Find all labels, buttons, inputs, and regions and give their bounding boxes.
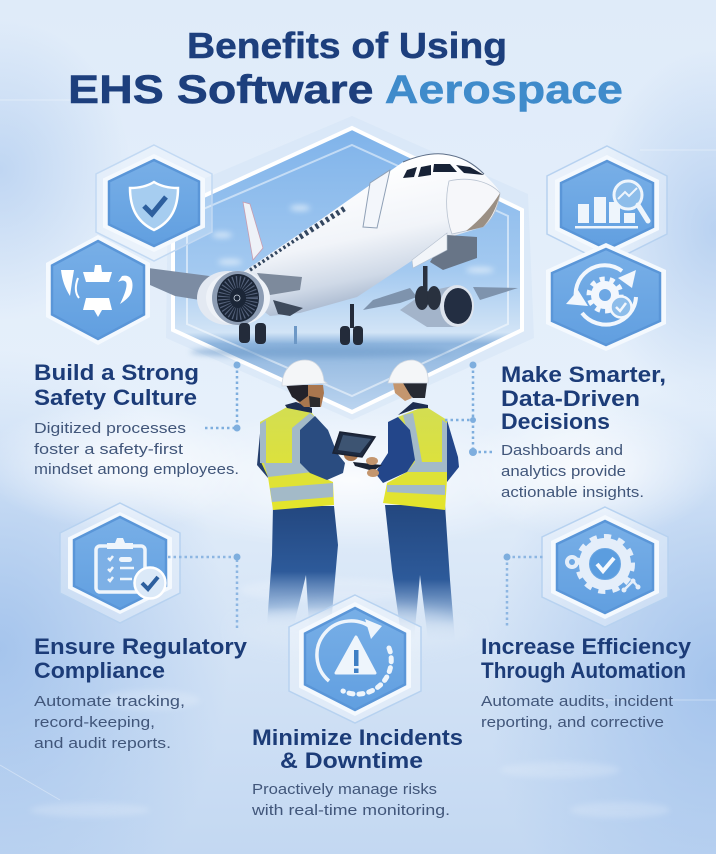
text block: data-driven decisions: actionable insights. xyxy=(501,484,644,501)
right worker xyxy=(375,360,459,640)
icon hexagon: analytics xyxy=(547,146,667,264)
far wing xyxy=(363,287,518,310)
text block: data-driven decisions: Data-Driven xyxy=(501,386,640,411)
text block: safety culture: mindset among employees. xyxy=(34,461,239,478)
icon: rotating symbols xyxy=(61,265,133,317)
icon: bars and magnifier xyxy=(575,181,648,228)
text block: efficiency automation: reporting, and corrective xyxy=(481,714,664,731)
text block: efficiency automation: Increase Efficiency xyxy=(481,634,692,659)
hard hat xyxy=(388,360,428,383)
text block: safety culture: Build a Strong xyxy=(34,360,199,385)
icon hexagon: regulatory clipboard xyxy=(60,503,180,623)
gear bay xyxy=(430,235,477,270)
title: Benefits of Using xyxy=(187,25,507,66)
ground fog xyxy=(235,608,475,652)
text block: efficiency automation: Automate audits, incident xyxy=(481,693,674,710)
trousers xyxy=(385,505,455,640)
text block: regulatory compliance: Ensure Regulatory xyxy=(34,634,248,659)
hair xyxy=(402,383,427,398)
text block: safety culture: Digitized processes xyxy=(34,420,186,437)
icon hexagon: safety shield xyxy=(96,145,212,261)
icon: warning with cycle xyxy=(317,619,391,694)
text block: minimize incidents: with real-time monitoring. xyxy=(251,802,450,819)
text block: minimize incidents: Proactively manage risks xyxy=(252,781,437,798)
icon hexagon: automation gear xyxy=(542,507,668,627)
connector: data decisions xyxy=(445,362,492,456)
text block: efficiency automation xyxy=(481,634,692,731)
neck and face xyxy=(296,385,324,407)
text block: safety culture: foster a safety-first xyxy=(34,441,184,458)
collar xyxy=(285,402,312,413)
reflective stripes xyxy=(260,413,333,502)
collar xyxy=(398,402,428,415)
connector: safety culture xyxy=(205,362,240,432)
text block: regulatory compliance xyxy=(34,634,248,752)
nose gear xyxy=(415,266,441,310)
text block: regulatory compliance: record-keeping, xyxy=(34,714,155,731)
workers illustration xyxy=(257,360,459,640)
hand xyxy=(344,449,358,461)
text block: regulatory compliance: Automate tracking, xyxy=(34,693,185,710)
connector: regulatory compliance xyxy=(168,554,240,628)
text block: data-driven decisions: Dashboards and xyxy=(501,442,623,459)
text block: safety culture: Safety Culture xyxy=(34,385,197,410)
right engine xyxy=(400,285,474,327)
near wing xyxy=(148,268,217,300)
icon hexagon: gear cycle xyxy=(546,243,666,351)
door xyxy=(363,170,390,228)
left worker xyxy=(257,360,358,625)
text block: minimize incidents xyxy=(251,725,463,819)
text block: regulatory compliance: and audit reports. xyxy=(34,735,171,752)
vest xyxy=(383,408,450,510)
text block: regulatory compliance: Compliance xyxy=(34,658,165,683)
icon hexagon: turbine culture xyxy=(46,235,150,345)
inner wing fairing xyxy=(257,273,302,295)
icon: shield check xyxy=(130,182,178,230)
cockpit windows xyxy=(403,164,484,178)
face xyxy=(393,383,412,401)
fuselage xyxy=(243,154,500,316)
cockpit roof line xyxy=(403,154,484,174)
near sleeve xyxy=(375,417,415,483)
hard hat xyxy=(282,360,327,386)
title: EHS Software Aerospace xyxy=(68,68,623,112)
icon hexagon: minimize incidents xyxy=(289,595,421,723)
text block: minimize incidents: & Downtime xyxy=(280,748,423,773)
near sleeve xyxy=(300,416,345,480)
far sleeve xyxy=(447,420,459,482)
trousers xyxy=(267,506,338,625)
text block: minimize incidents: Minimize Incidents xyxy=(252,725,463,750)
panel: aircraft hexagon xyxy=(166,116,534,420)
nose cone xyxy=(447,179,500,234)
text block: data-driven decisions xyxy=(501,362,666,501)
connector: automation xyxy=(504,554,545,626)
icon: clipboard with check xyxy=(96,538,166,598)
airplane xyxy=(148,154,518,345)
text block: safety culture xyxy=(34,360,239,478)
main gears xyxy=(239,304,363,345)
icon: gear with cycle arrows xyxy=(566,265,636,325)
far sleeve xyxy=(257,423,268,478)
tail fin xyxy=(243,202,263,260)
text block: data-driven decisions: Decisions xyxy=(501,409,610,434)
title xyxy=(68,25,623,112)
vest xyxy=(260,407,334,510)
text block: data-driven decisions: analytics provide xyxy=(501,463,626,480)
text block: data-driven decisions: Make Smarter, xyxy=(501,362,666,387)
tablet xyxy=(333,432,382,477)
icon: gear with check xyxy=(567,537,640,592)
left engine xyxy=(197,271,270,325)
text block: efficiency automation: Through Automation xyxy=(481,658,686,683)
cabin windows xyxy=(250,207,347,270)
reflective stripes xyxy=(387,413,448,495)
